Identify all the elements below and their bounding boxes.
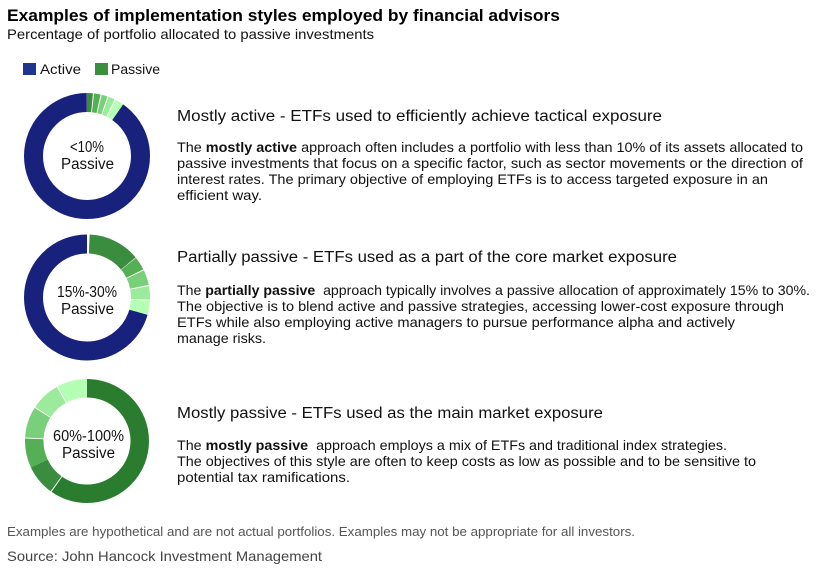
donut label: 60%-100% [53,428,124,445]
legend [23,61,160,77]
text: mostly passive description [177,437,756,485]
source: Source: John Hancock Investment Management [7,548,322,564]
text: partially passive description [177,282,810,346]
text: partially passive description: manage risks. [177,330,266,346]
title: Examples of implementation styles employed by financial advisors [7,7,560,25]
donut: mostly passive [34,388,140,494]
donut label: Passive [62,445,115,462]
donut label: 15%-30% [57,284,117,301]
text: mostly active description: efficient way. [177,187,262,203]
donut label [57,284,117,318]
legend: active: Active [40,61,81,77]
text: mostly active description: interest rates. The primary objective of employing ETFs is to access targeted exposure in an [177,171,768,187]
text: mostly passive description: The objectives of this style are often to keep costs as low as possible and to be sensitive to [177,453,756,469]
donut label [53,428,124,462]
heading: mostly passive: Mostly passive - ETFs used as the main market exposure [177,405,603,422]
text: mostly passive description: potential tax ramifications. [177,469,350,485]
donut: partially passive [34,244,140,351]
text: mostly active description: passive investments that focus on a specific factor, such as sector movements or the direction of [177,155,803,171]
subtitle: Percentage of portfolio allocated to passive investments [7,26,374,42]
footnote: Examples are hypothetical and are not actual portfolios. Examples may not be appropriate for all investors. [7,524,635,539]
donut label: Passive [61,156,114,173]
text: partially passive description: The objective is to blend active and passive strategies, accessing lower-cost exposure through [177,298,784,314]
donut: mostly active [34,102,140,210]
donut label [61,139,114,173]
text: mostly passive description: The mostly passive approach employs a mix of ETFs and traditional index strategies. [177,437,727,453]
text: mostly active description [177,139,803,203]
heading: partially passive: Partially passive - ETFs used as a part of the core market exposure [177,249,677,266]
heading: mostly active: Mostly active - ETFs used to efficiently achieve tactical exposure [177,108,662,125]
text: partially passive description: ETFs while also employing active managers to pursue performance alpha and actively [177,314,735,330]
text: partially passive description: The partially passive approach typically involves a passive allocation of approximately 15% to 30%. [177,282,810,298]
donut label: Passive [61,301,114,318]
legend: passive: Passive [111,61,160,77]
donut label: <10% [70,139,104,156]
text: mostly active description: The mostly active approach often includes a portfolio with less than 10% of its assets allocated to [177,139,803,155]
